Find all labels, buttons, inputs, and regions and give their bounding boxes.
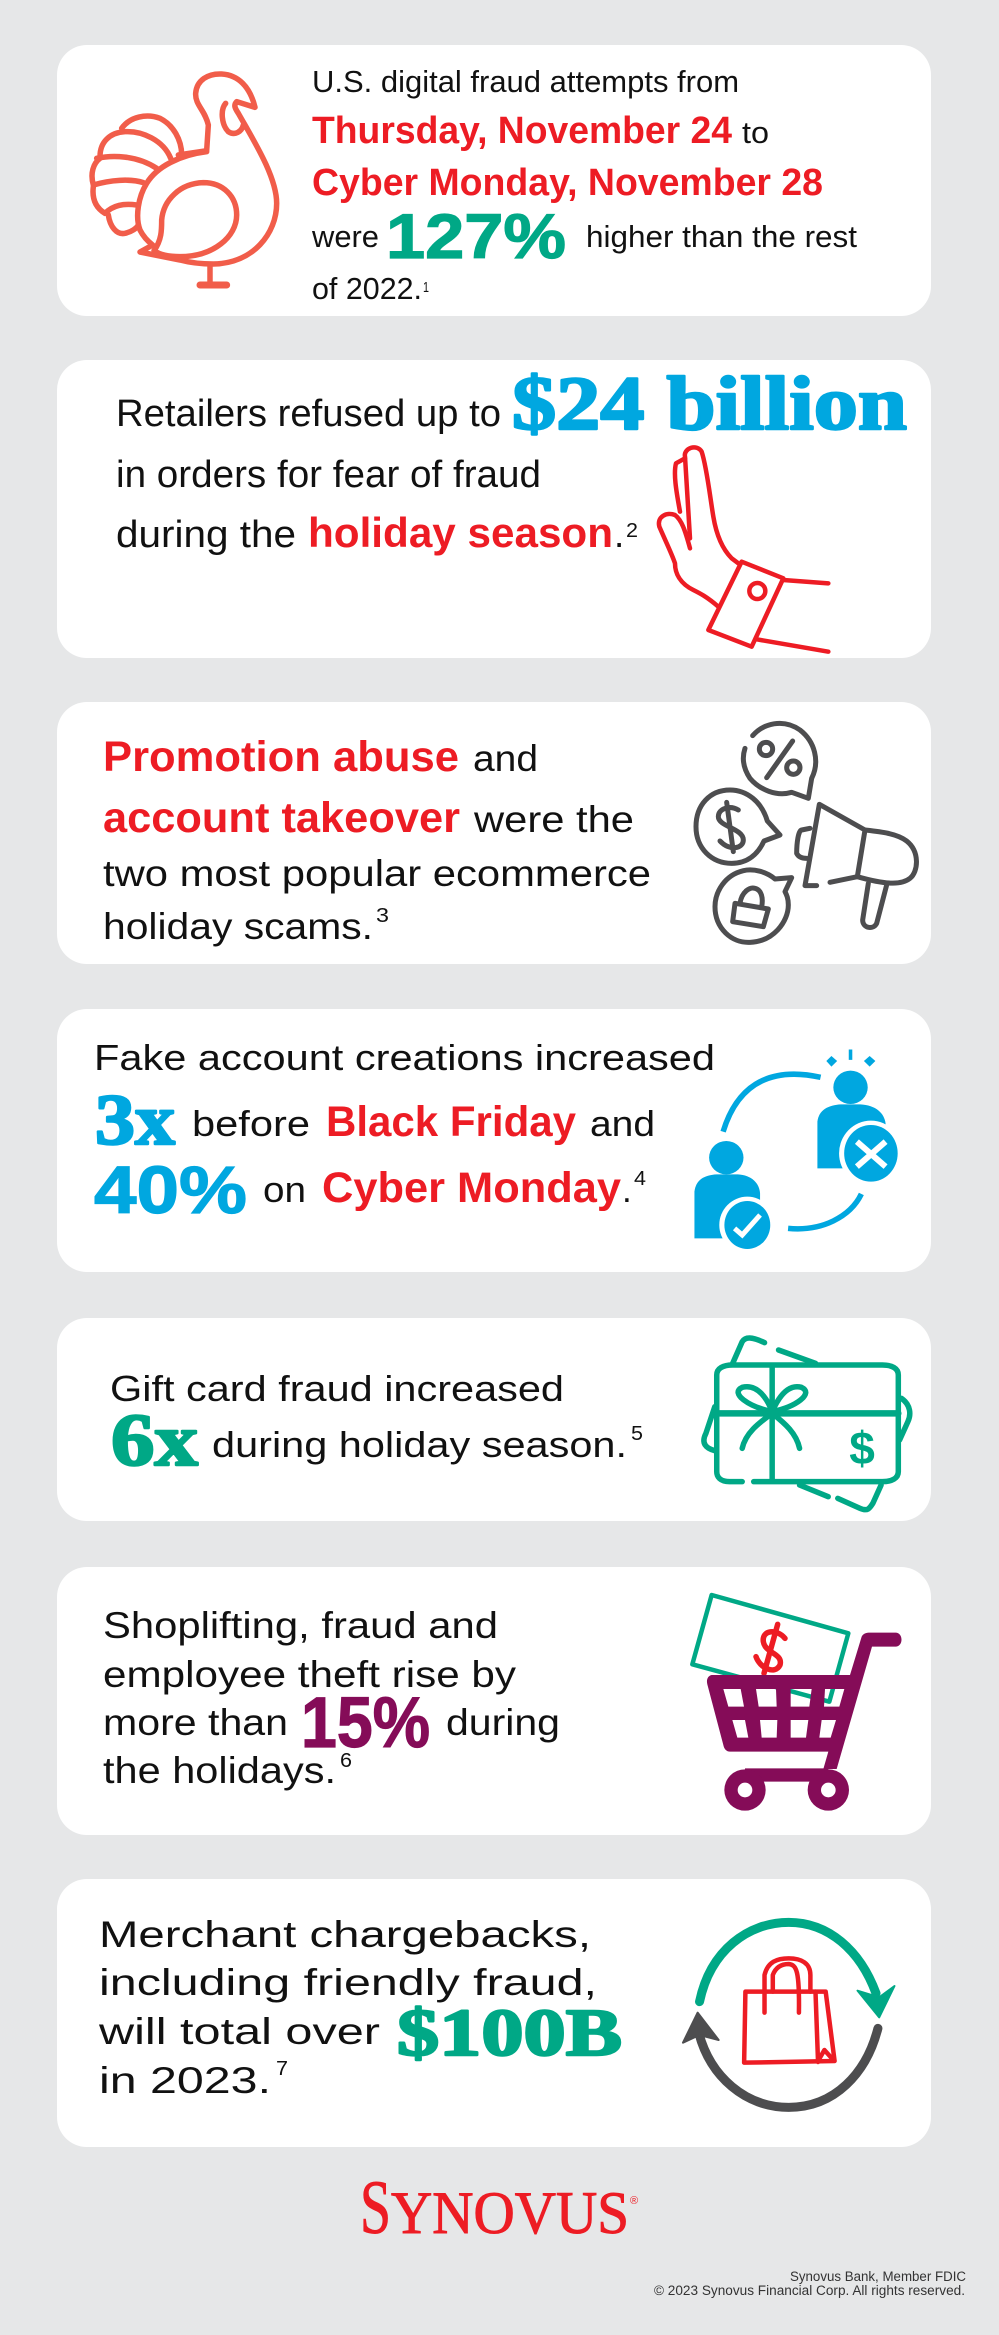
footer: legal text	[654, 2269, 966, 2298]
card background	[57, 1318, 931, 1521]
text block	[116, 362, 907, 556]
text block	[110, 1368, 643, 1482]
icon: shopping bag with return arrows	[683, 1922, 894, 2107]
text block: during holiday season.	[212, 1424, 627, 1465]
text block: 2	[626, 520, 638, 542]
text block	[311, 64, 857, 306]
stat: 40%: 40%	[94, 1153, 247, 1228]
text block: including friendly fraud,	[99, 1962, 597, 2003]
text block: 7	[276, 2058, 288, 2080]
stat: $100B: $100B	[397, 1996, 622, 2070]
text block: .	[614, 514, 624, 555]
text block: of 2022.	[312, 271, 422, 306]
text block: Fake account creations increased	[94, 1037, 715, 1078]
text block	[103, 1605, 560, 1791]
icon: refusing hand	[659, 447, 828, 652]
logo: Synovus: YNOVUS	[391, 2180, 629, 2246]
icon glyph: dollar: $	[849, 1422, 875, 1474]
text block	[98, 1914, 622, 2101]
icon: megaphone with bubbles	[696, 723, 916, 942]
stat: 6x: 6x	[111, 1400, 198, 1482]
panel: refused orders	[57, 360, 931, 658]
panel: ecommerce scams	[57, 702, 931, 964]
text block: and	[473, 738, 538, 779]
text block: 1	[423, 279, 429, 296]
text block: Gift card fraud increased	[110, 1368, 564, 1409]
text block: 6	[340, 1750, 352, 1772]
text block: two most popular ecommerce	[103, 853, 651, 894]
text block: Retailers refused up to	[116, 393, 501, 435]
text block: holiday scams.	[103, 906, 373, 947]
text block: employee theft rise by	[103, 1654, 517, 1695]
text block: on	[263, 1169, 306, 1210]
text block: during the	[116, 514, 296, 556]
text block: and	[590, 1103, 655, 1144]
icon: shopping cart with bill	[692, 1595, 901, 1811]
logo: Synovus: S	[360, 2166, 391, 2250]
text block	[94, 1037, 715, 1228]
panel: shoplifting	[57, 1567, 931, 1835]
logo: Synovus	[360, 2166, 638, 2250]
text block: Promotion abuse	[103, 733, 459, 781]
card background	[57, 1879, 931, 2147]
text block: account takeover	[103, 794, 460, 842]
text block: the holidays.	[103, 1750, 336, 1791]
icon: users with check and cross	[694, 1050, 903, 1253]
footer: legal text: Synovus Bank, Member FDIC	[790, 2269, 966, 2284]
text block: Black Friday	[326, 1098, 576, 1146]
stat: 127%: 127%	[386, 202, 566, 272]
text block: Thursday, November 24	[312, 110, 732, 152]
text block: before	[192, 1103, 310, 1144]
text block: higher than the rest	[586, 219, 857, 254]
text block: in 2023.	[99, 2060, 271, 2101]
text block: will total over	[98, 2011, 380, 2052]
panel: gift card fraud	[57, 1318, 931, 1521]
text block	[103, 733, 651, 947]
stat: 3x: 3x	[95, 1080, 175, 1160]
card background	[57, 702, 931, 964]
card background	[57, 45, 931, 316]
footer: legal text: © 2023 Synovus Financial Corp. All rights reserved.	[654, 2283, 965, 2298]
logo: Synovus: ®	[630, 2195, 638, 2207]
text block: more than	[103, 1702, 288, 1743]
text block: Cyber Monday, November 28	[312, 162, 823, 204]
text block: during	[446, 1702, 560, 1743]
card background	[57, 1009, 931, 1272]
icon: turkey	[92, 74, 277, 285]
text block: 3	[376, 905, 389, 927]
text block: holiday season	[308, 509, 613, 556]
text block: .	[622, 1171, 632, 1210]
stat: $24 billion: $24 billion	[512, 362, 907, 446]
text block: were	[311, 219, 379, 254]
text block: Cyber Monday	[322, 1164, 621, 1212]
text block: were the	[473, 799, 634, 840]
text block: 5	[631, 1423, 643, 1445]
card background	[57, 1567, 931, 1835]
stat: 15%: 15%	[301, 1684, 430, 1763]
text block: 4	[634, 1168, 646, 1190]
panel: digital fraud attempts	[57, 45, 931, 316]
panel: fake accounts	[57, 1009, 931, 1272]
text block: Shoplifting, fraud and	[103, 1605, 498, 1646]
icon: gift card	[704, 1338, 910, 1510]
text block: to	[742, 115, 769, 150]
text block: U.S. digital fraud attempts from	[312, 64, 739, 99]
text block: Merchant chargebacks,	[99, 1914, 591, 1955]
text block: in orders for fear of fraud	[116, 454, 541, 496]
card background	[57, 360, 931, 658]
panel: chargebacks	[57, 1879, 931, 2147]
